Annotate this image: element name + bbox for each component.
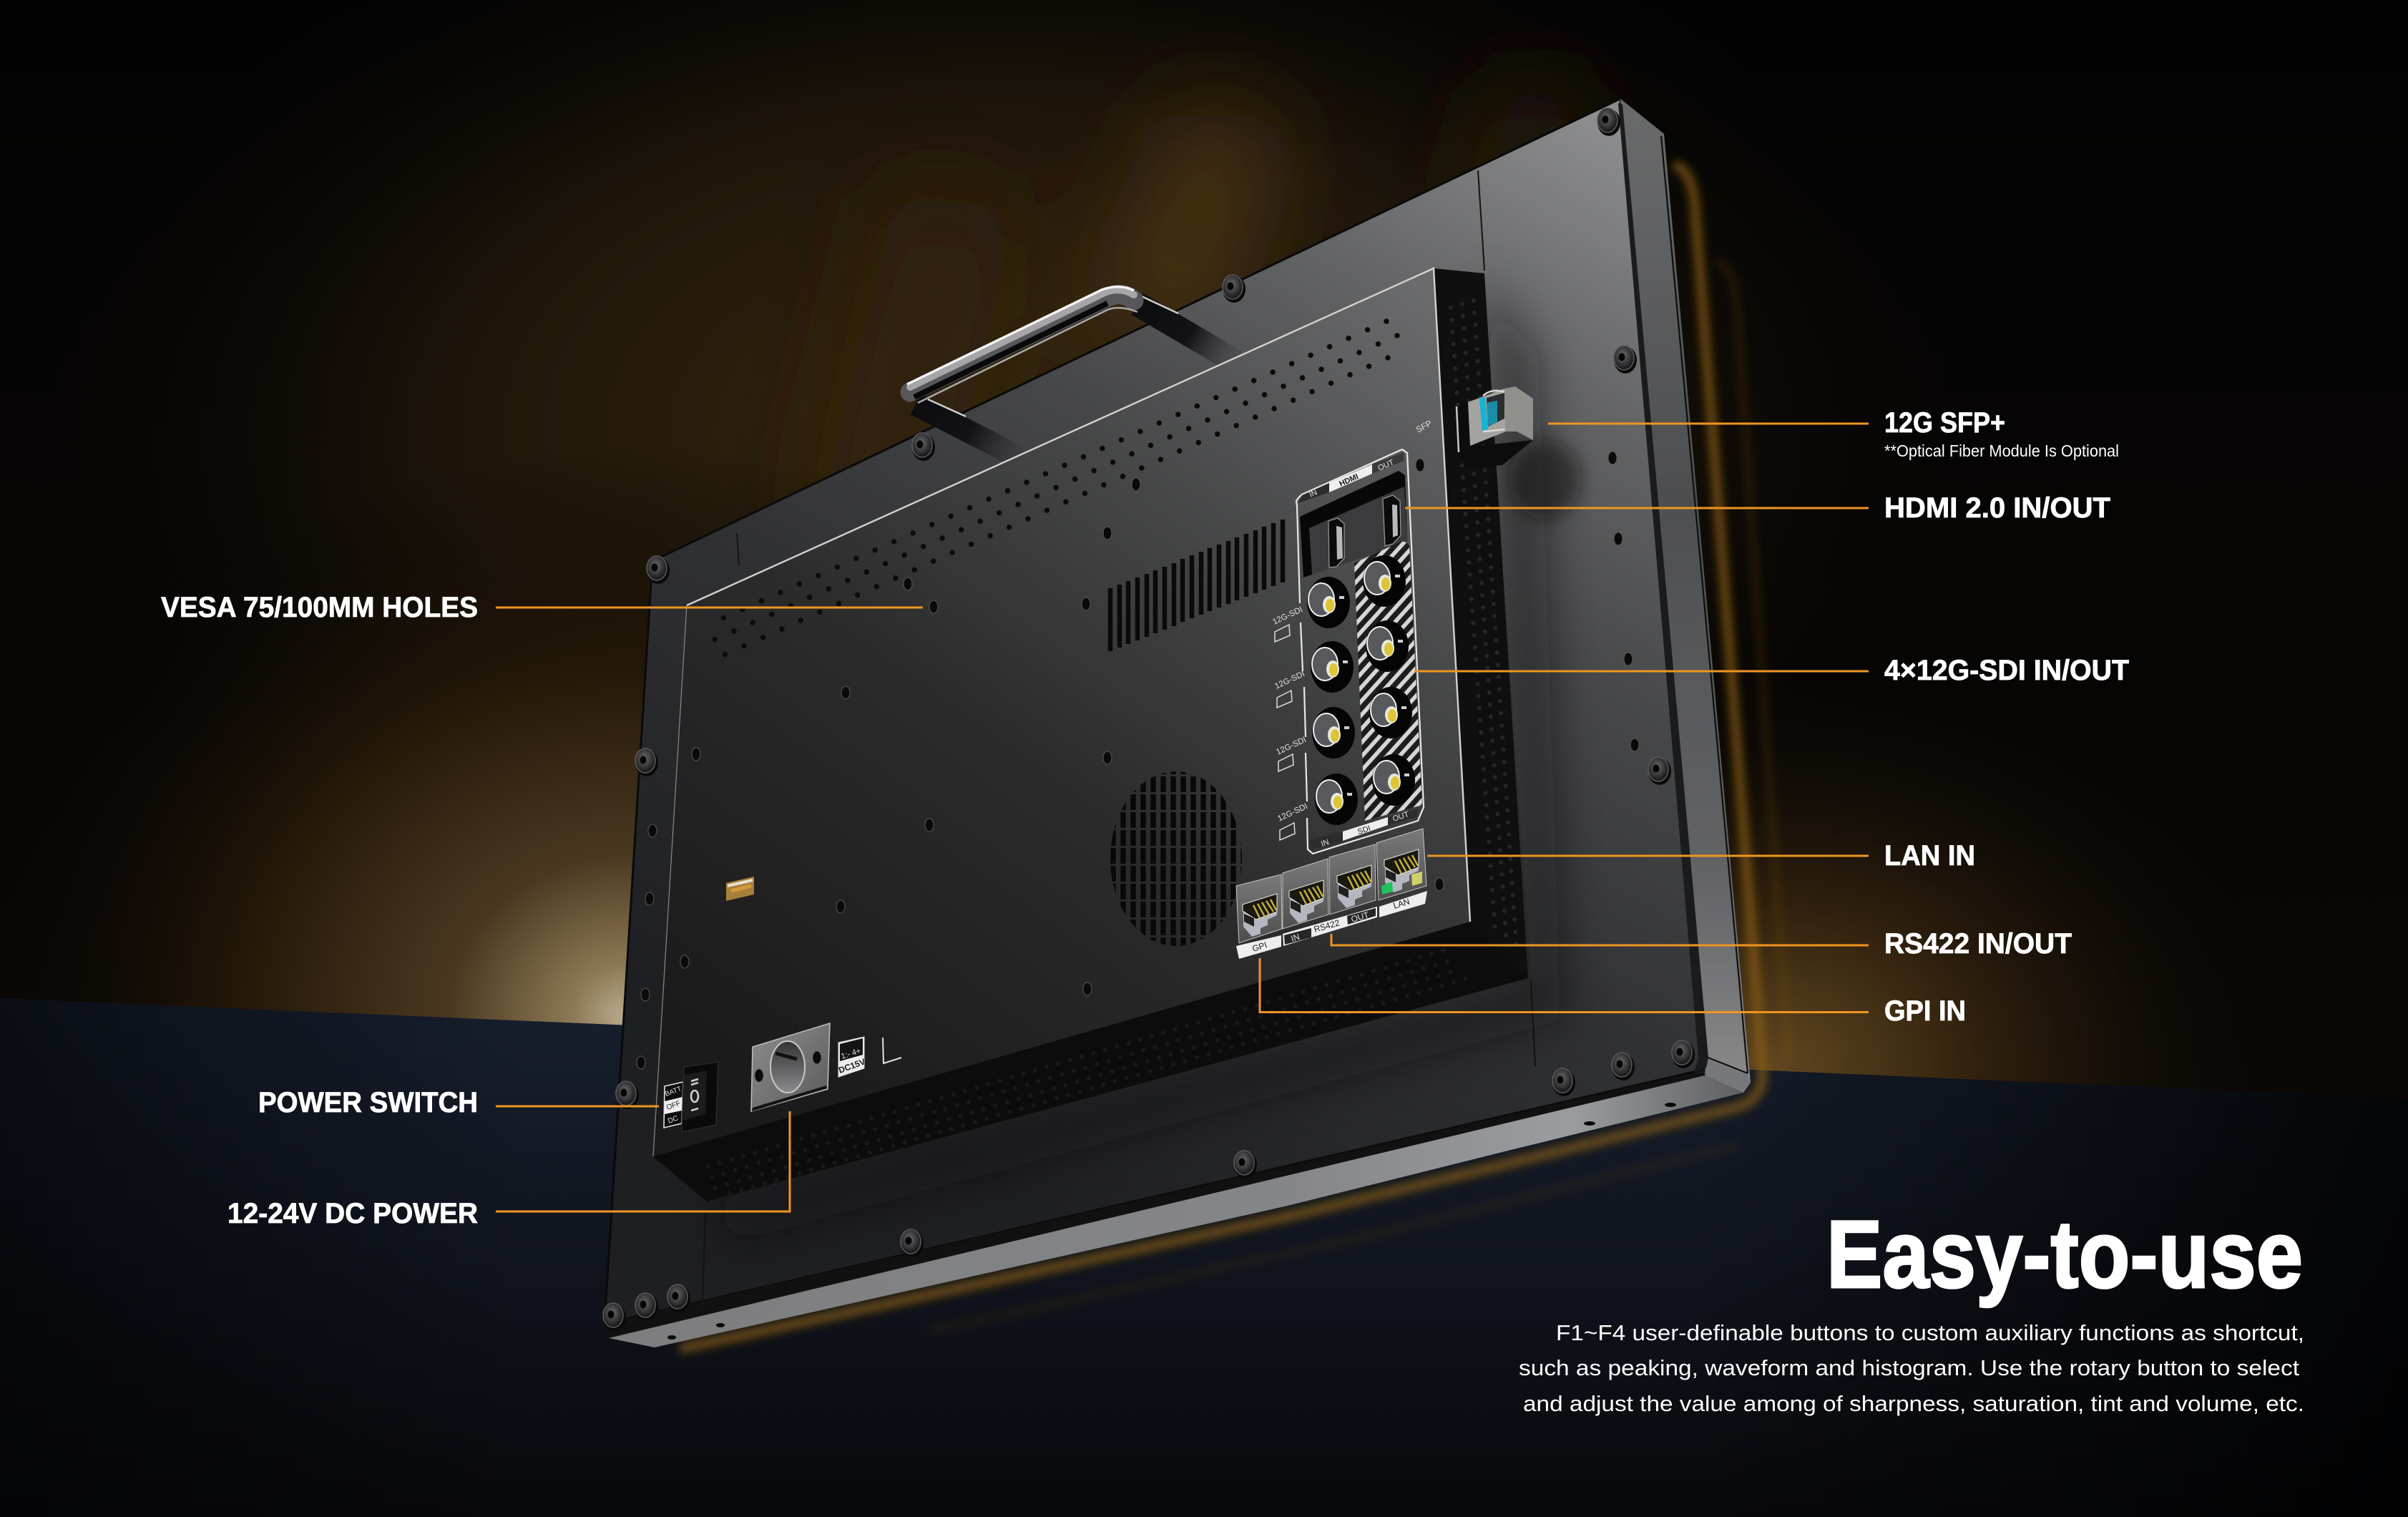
LAN LEDs — [1381, 872, 1422, 894]
socket latch — [775, 1053, 797, 1059]
label: LAN IN — [1884, 840, 1975, 872]
SDI channel labels: 12G-SDI — [1276, 802, 1309, 824]
monitor bottom silver strip — [609, 1075, 1743, 1347]
port labels — [1251, 897, 1411, 954]
handle right leg — [1137, 304, 1241, 365]
RJ45 ports — [1236, 829, 1427, 959]
background glow: upper centre wash — [36, 0, 1967, 1002]
SDI channel labels: 12G-SDI — [1275, 736, 1308, 757]
SFP cage rim — [1457, 406, 1459, 452]
HDMI centre tag — [1329, 464, 1372, 492]
title: Easy-to-use — [1826, 1201, 2303, 1308]
switch labels — [664, 1085, 682, 1126]
SFP inner blue — [1487, 401, 1497, 426]
HDMI labels: IN — [1308, 488, 1318, 499]
RS422 OUT port — [1329, 844, 1376, 914]
callout: 12G SFP+ — [1548, 407, 2119, 460]
monitor right edge face — [1620, 99, 1751, 1083]
raised module right face — [1434, 268, 1528, 978]
monitor bottom black band — [603, 1072, 1706, 1339]
socket plate groove — [752, 1086, 827, 1111]
panel outline — [1296, 449, 1424, 854]
SFP cage — [1457, 402, 1533, 469]
power switch — [664, 1062, 718, 1132]
leader line — [1548, 422, 1869, 425]
L mark — [883, 1038, 901, 1063]
SFP label: SFP — [1414, 418, 1434, 435]
fan grille — [1110, 771, 1242, 946]
vent grille — [1110, 520, 1283, 651]
label: VESA 75/100MM HOLES — [161, 592, 478, 623]
monitor frame band on right — [1618, 103, 1708, 1073]
label: POWER SWITCH — [258, 1087, 478, 1118]
HDMI OUT port — [1383, 495, 1401, 546]
socket plate — [751, 1023, 830, 1111]
port labels: GPI — [1251, 940, 1268, 954]
SFP blue latch — [1479, 397, 1488, 431]
description line 1: F1~F4 user-definable buttons to custom auxiliary functions as shortcut, — [1556, 1320, 2304, 1345]
raised module left edge — [653, 605, 687, 1156]
port labels: LAN — [1392, 897, 1411, 911]
sticker — [726, 877, 754, 901]
top ventilation holes — [705, 321, 1397, 662]
switch labels: OFF — [665, 1100, 682, 1112]
note: **Optical Fiber Module Is Optional — [1884, 442, 2119, 460]
rocker marks — [691, 1079, 698, 1111]
handle left leg — [916, 404, 1023, 459]
leader line — [1414, 670, 1869, 673]
HDMI labels: HDMI — [1338, 472, 1360, 489]
SDI labels: IN — [1320, 838, 1330, 849]
perforations on module sides — [708, 301, 1517, 1194]
SFP side housing — [1504, 386, 1533, 440]
SFP bail wire — [1483, 391, 1504, 431]
DC15V label: DC15V — [837, 1056, 866, 1075]
HDMI IN tag — [1298, 483, 1329, 503]
port labels: IN — [1290, 932, 1301, 944]
SDI IN tag — [1311, 831, 1343, 849]
callout: 12-24V DC POWER — [227, 1111, 790, 1229]
label: HDMI 2.0 IN/OUT — [1884, 492, 2110, 524]
SFP shadow — [1509, 440, 1581, 519]
SDI labels: OUT — [1391, 810, 1410, 824]
socket bore — [770, 1041, 805, 1093]
leader line — [496, 1105, 659, 1108]
RS422 IN and OUT tags — [1284, 908, 1376, 945]
callout: GPI IN — [1260, 958, 1966, 1027]
SFP module — [1457, 386, 1581, 519]
strip holes — [667, 1103, 1676, 1340]
HDMI labels — [1308, 458, 1396, 499]
SDI channel labels: 12G-SDI — [1271, 605, 1304, 627]
perimeter screws — [603, 108, 1695, 1331]
SDI labels — [1320, 810, 1410, 849]
SDI channel labels: 12G-SDI — [1273, 670, 1306, 691]
switch labels: DC — [667, 1115, 680, 1126]
SDI OUT tag — [1388, 809, 1419, 825]
DC15V label: 1:- 4+ — [840, 1047, 862, 1061]
raised module cast shadow — [707, 273, 1574, 1242]
handle lower reflection — [918, 308, 1137, 403]
HDMI recess lit floor — [1309, 487, 1407, 575]
SDI connectors — [1307, 555, 1415, 825]
handle tube — [910, 295, 1134, 392]
SDI OUT striped area — [1354, 542, 1422, 821]
handle dark reflection — [914, 303, 1107, 397]
monitor — [603, 99, 1751, 1347]
switch labels: BATT — [664, 1085, 682, 1098]
amber halo around monitor edge — [680, 165, 1788, 1349]
socket screws — [755, 1051, 821, 1082]
HDMI OUT tag — [1372, 452, 1404, 474]
background glow: right warm light — [1259, 665, 2289, 1467]
GPI port — [1236, 874, 1282, 943]
rocker body — [682, 1062, 718, 1132]
port labels: OUT — [1350, 909, 1371, 925]
SDI channel labels — [1271, 605, 1309, 840]
label: RS422 IN/OUT — [1884, 928, 2072, 960]
raised module bottom face — [653, 922, 1528, 1201]
description line 2: such as peaking, waveform and histogram. Use the rotary button to select — [1519, 1355, 2299, 1380]
LAN tag — [1379, 891, 1427, 917]
panel seams — [703, 170, 1535, 1305]
handle leg highlights — [928, 293, 1178, 416]
rocker face — [683, 1070, 707, 1121]
handle top highlight — [907, 287, 1134, 384]
SDI labels: SDI — [1356, 824, 1371, 836]
DC15V label — [837, 1037, 866, 1077]
label: 12G SFP+ — [1884, 407, 2005, 439]
port labels: RS422 — [1313, 917, 1341, 935]
HDMI IN port — [1328, 518, 1344, 567]
SDI centre tag — [1343, 817, 1388, 841]
label: 4×12G-SDI IN/OUT — [1884, 655, 2129, 686]
callout: RS422 IN/OUT — [1331, 928, 2072, 960]
HDMI recess — [1300, 471, 1407, 577]
DC power socket — [751, 1023, 901, 1111]
RS422 IN port — [1283, 859, 1328, 929]
leader line — [496, 607, 923, 608]
HDMI labels: OUT — [1376, 458, 1396, 473]
VESA and mounting holes — [637, 452, 1639, 1069]
background glow: upper light streaks — [873, 86, 1552, 544]
label: GPI IN — [1884, 995, 1966, 1027]
leader line — [1427, 854, 1869, 857]
monitor back plate — [605, 99, 1703, 1324]
switch label outline — [664, 1082, 683, 1128]
SFP front plate — [1468, 389, 1506, 446]
background: lower navy floor — [0, 998, 2408, 1517]
SFP cavity — [1487, 393, 1504, 426]
background: floor side vignette — [0, 998, 2408, 1517]
RS422 tag — [1283, 907, 1377, 946]
background: upper dark warm area — [0, 0, 2408, 1116]
carry handle — [907, 287, 1241, 459]
leader line — [496, 1111, 790, 1211]
right edge lower lip — [1705, 1058, 1751, 1093]
leader line — [1405, 507, 1869, 509]
background glow: left warm light — [0, 444, 1273, 1517]
LAN port — [1376, 829, 1426, 900]
description line 3: and adjust the value among of sharpness, saturation, tint and volume, etc. — [1523, 1391, 2304, 1416]
leader line — [1331, 934, 1869, 945]
handle upper sheen — [910, 290, 1134, 387]
switch OFF band — [665, 1097, 682, 1114]
right edge lines — [1661, 136, 1748, 1073]
jack sockets — [1243, 849, 1419, 937]
leader line — [1260, 958, 1869, 1012]
GPI tag — [1236, 935, 1281, 959]
raised module front face — [653, 268, 1470, 1156]
raised module highlighted edges — [687, 268, 1470, 922]
label: 12-24V DC POWER — [227, 1198, 478, 1229]
description text — [1519, 1320, 2304, 1416]
port panel — [1296, 449, 1424, 854]
